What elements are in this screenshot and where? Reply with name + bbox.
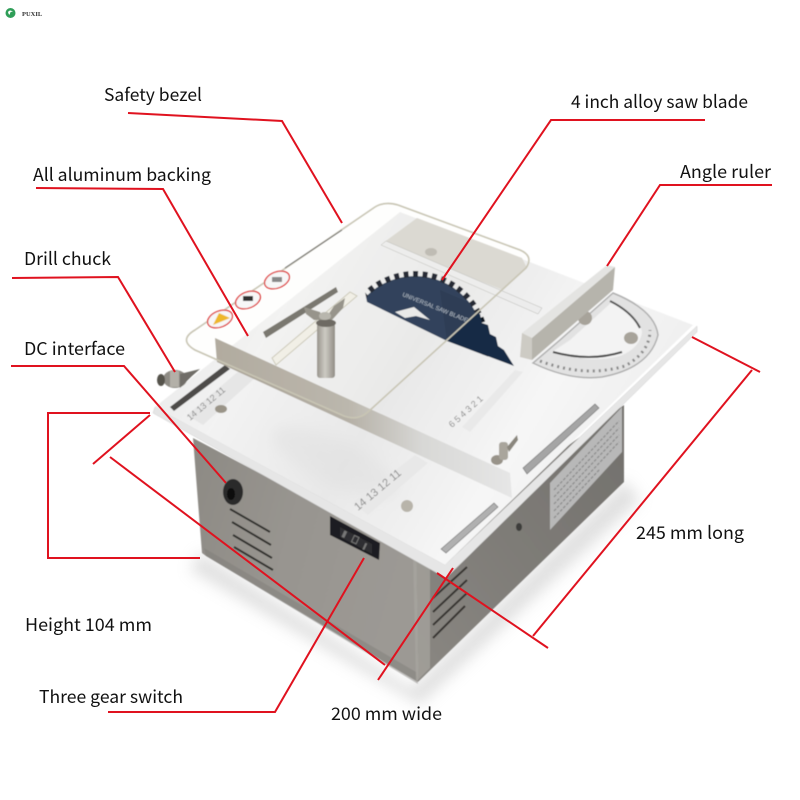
drill chuck (157, 369, 200, 388)
leader: DC interface (11, 366, 226, 483)
back block (383, 218, 527, 290)
leader: all aluminum backing (36, 188, 248, 336)
ruler upper (447, 370, 523, 432)
base: side face (416, 405, 624, 682)
label: three gear switch: Three gear switch (39, 684, 183, 709)
logo: PUXIL: PUXIL (22, 11, 43, 18)
label: safety bezel: Safety bezel (104, 82, 202, 107)
slot right lower (441, 503, 498, 553)
left vents (230, 509, 273, 570)
base: bottom edge (204, 548, 418, 684)
ruler left (185, 370, 255, 425)
dimension: height (48, 413, 200, 558)
wing nut right (491, 435, 518, 465)
base: front face (193, 438, 418, 682)
leader: drill chuck (12, 277, 175, 372)
ground shadow (190, 480, 640, 705)
dimension tick: left corner (93, 415, 150, 464)
leader: angle ruler (607, 185, 772, 266)
side screw hole (516, 523, 522, 531)
DC interface jack (223, 479, 243, 505)
slot dark under acrylic (263, 287, 338, 338)
saw blade (364, 270, 514, 366)
ruler lower: 14 13 12 11 (352, 467, 404, 513)
table edge (153, 326, 697, 578)
spec label on side (550, 407, 622, 530)
post with wing nut (304, 298, 345, 378)
label: all aluminum backing: All aluminum backing (33, 162, 211, 187)
label: height 104 mm: Height 104 mm (25, 612, 152, 637)
logo: PUXIL (6, 8, 43, 18)
angle ruler protractor (533, 293, 658, 378)
acrylic slot (272, 292, 357, 365)
label: DC interface: DC interface (24, 336, 125, 361)
dimension: length (533, 370, 752, 636)
warning icons (205, 268, 292, 331)
label: drill chuck: Drill chuck (24, 246, 111, 271)
saw blade: UNIVERSAL SAW BLADE (401, 292, 469, 324)
angle ruler fence (520, 265, 615, 360)
leader: saw blade (442, 120, 705, 280)
ruler left: 14 13 12 11 (185, 385, 227, 423)
slot right upper (523, 404, 599, 474)
product illustration: mini table saw (153, 203, 697, 705)
dimension tick: right corner (692, 337, 760, 372)
label: saw blade: 4 inch alloy saw blade (571, 89, 748, 114)
dimension tick: front corner (378, 568, 453, 680)
label: 245 mm long: 245 mm long (636, 520, 744, 545)
aluminum backing bar: front face (215, 338, 512, 498)
leader: three gear switch (108, 558, 364, 712)
right vents (433, 567, 467, 638)
acrylic back edge (285, 230, 342, 268)
label: 200 mm wide: 200 mm wide (331, 701, 442, 726)
leader: safety bezel (128, 113, 342, 223)
dimension: width (110, 457, 385, 665)
safety bezel: acrylic guard (186, 203, 529, 418)
table top (155, 212, 693, 565)
ruler upper: 6 5 4 3 2 1 (447, 394, 485, 429)
slot left (170, 365, 230, 411)
three gear switch (330, 516, 380, 560)
ruler lower (352, 455, 428, 515)
table smudge (262, 412, 408, 512)
dimension tick: length front (437, 573, 548, 648)
label: angle ruler: Angle ruler (680, 159, 771, 184)
